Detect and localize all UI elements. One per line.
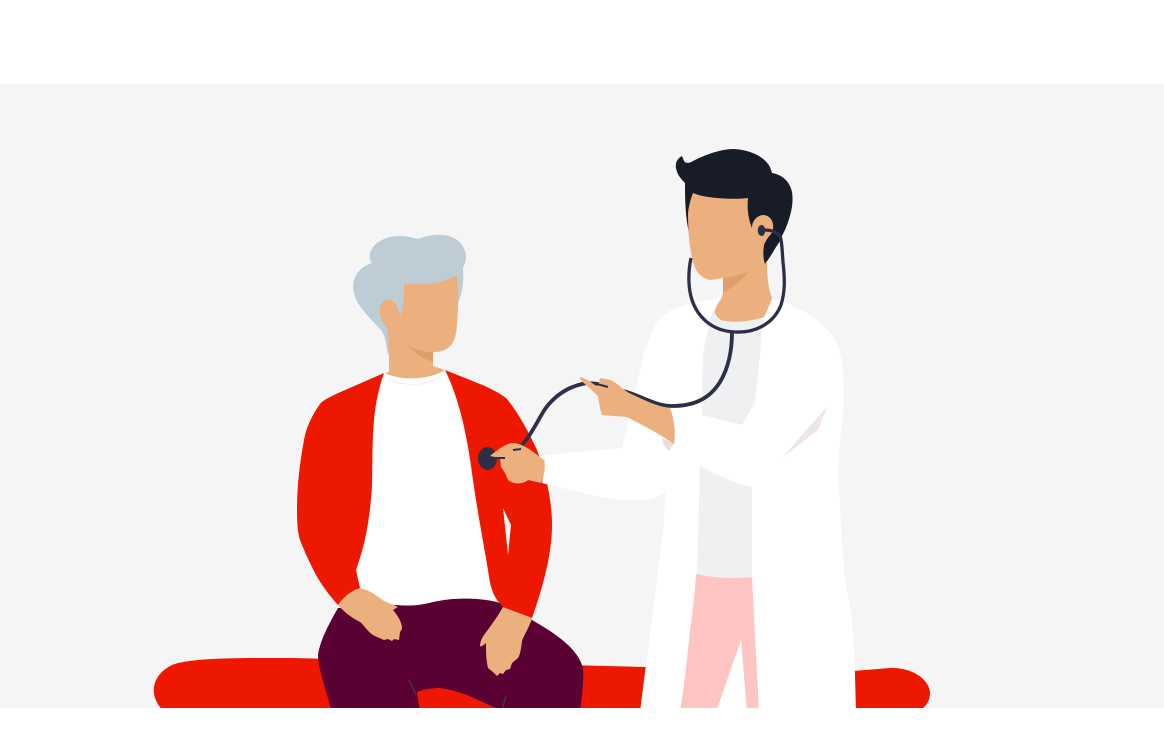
stethoscope tube tip on hand <box>513 449 521 450</box>
patient <box>297 235 583 712</box>
chest piece stem <box>495 457 505 459</box>
patient left cardigan panel <box>297 373 384 605</box>
doctor lower hand <box>490 443 545 483</box>
patient trousers <box>318 599 583 712</box>
stethoscope chest piece <box>478 447 497 470</box>
patient shirt collar line <box>388 375 442 384</box>
stethoscope segment over hand <box>597 384 608 387</box>
patient right hand <box>480 607 532 676</box>
doctor neck shadow <box>723 271 749 293</box>
doctor <box>478 149 856 712</box>
gap between arm and torso <box>503 508 511 555</box>
doctor hair <box>676 149 793 264</box>
patient hair <box>353 235 466 355</box>
stethoscope ear tube <box>689 230 784 332</box>
doctor sideburn <box>763 233 782 264</box>
coat fold <box>783 407 827 457</box>
patient left hand <box>338 588 402 641</box>
doctor head and neck <box>688 193 773 322</box>
lower hand shadow <box>662 438 674 450</box>
stethoscope ear tip <box>758 225 765 236</box>
doctor undershirt upper <box>702 310 763 425</box>
doctor upper hand <box>580 377 675 444</box>
bench <box>154 658 930 708</box>
doctor trousers <box>680 574 759 712</box>
patient head and neck <box>380 275 458 380</box>
scene <box>154 149 930 714</box>
stethoscope <box>478 225 784 470</box>
doctor undershirt lower <box>697 466 752 578</box>
patient white shirt <box>356 370 497 606</box>
doctor lab coat <box>542 298 856 712</box>
patient neck shadow <box>408 345 433 362</box>
patient right cardigan panel <box>445 370 552 618</box>
stethoscope main tube <box>517 332 732 450</box>
